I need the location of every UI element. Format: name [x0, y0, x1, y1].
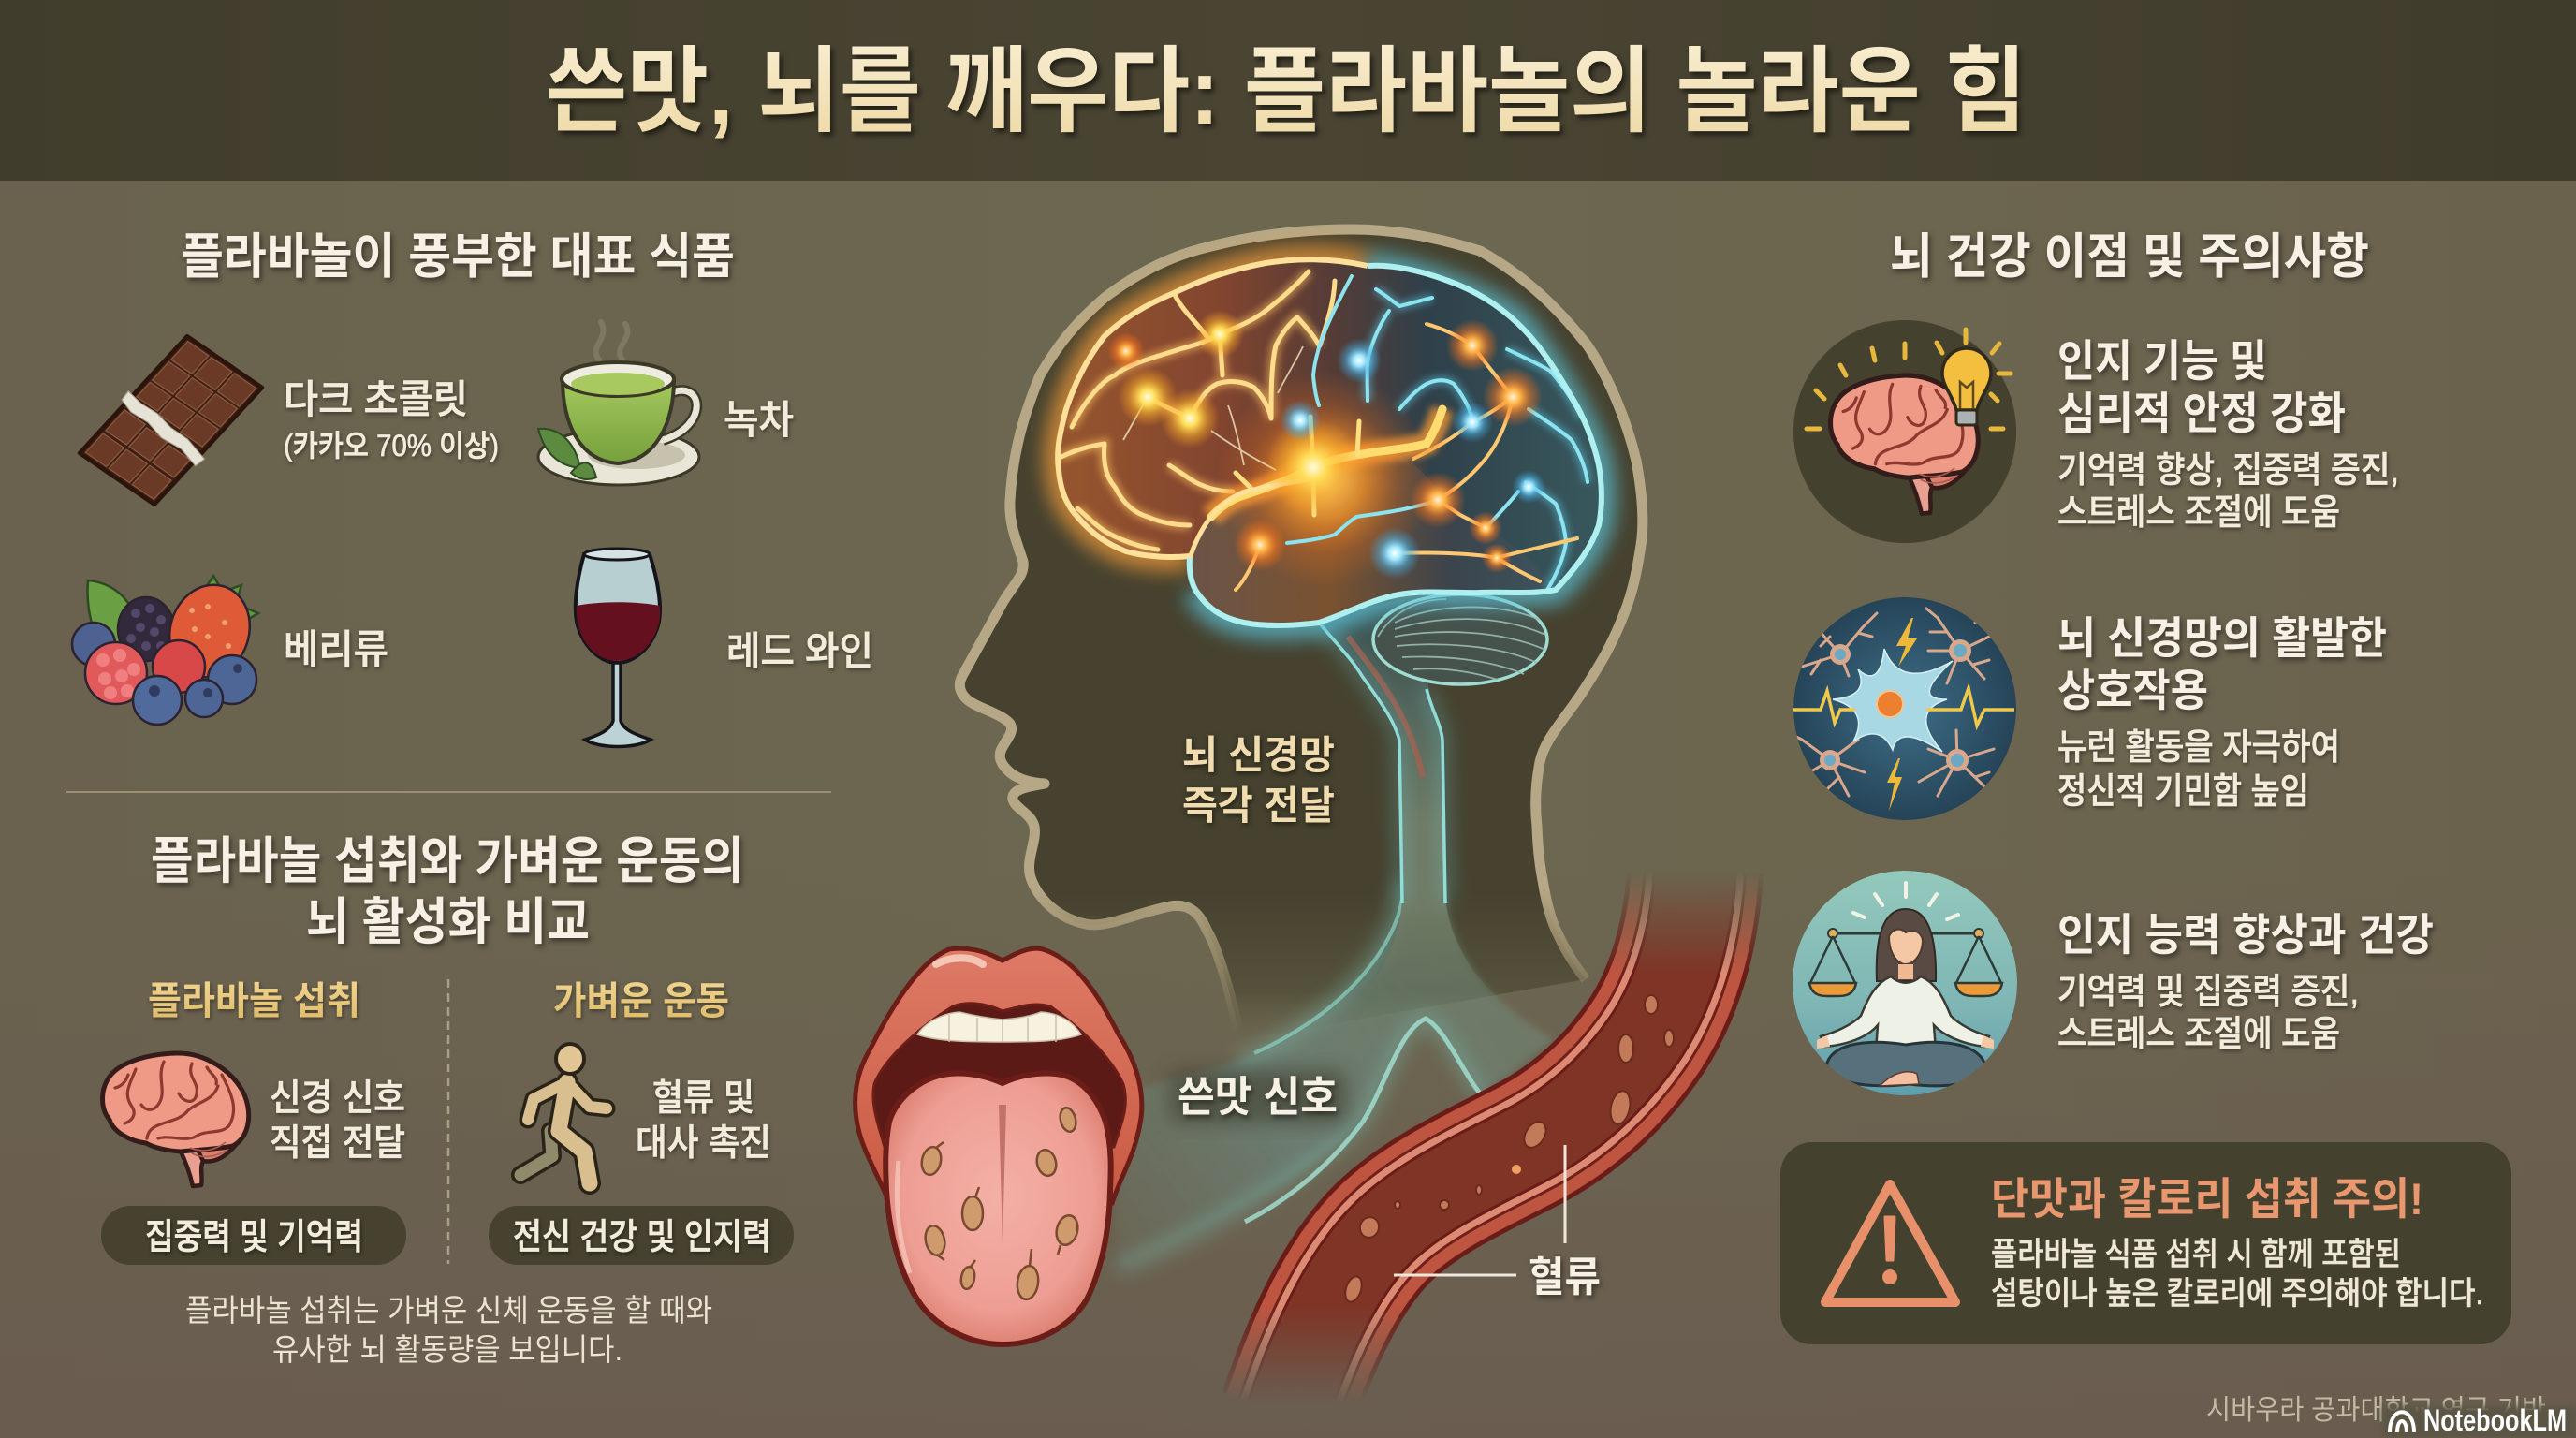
label: green tea: 녹차 — [724, 398, 794, 442]
heading: comparison: 뇌 활성화 비교 — [306, 894, 590, 950]
text: blood flow: 대사 촉진 — [636, 1123, 771, 1164]
text: cognitive function: 스트레스 조절에 도움 — [2057, 493, 2340, 533]
icon: brain with light bulb — [1793, 320, 2016, 543]
label: cacao note: (카카오 70% 이상) — [284, 429, 499, 462]
icon: meditating person with scales — [1793, 871, 2017, 1095]
text: neural signal: 신경 신호 — [270, 1078, 405, 1119]
text: neural interaction: 정신적 기민함 높임 — [2057, 772, 2309, 812]
text: neural signal — [270, 1078, 405, 1164]
text: warning body: 플라바놀 식품 섭취 시 함께 포함된 — [1991, 1237, 2401, 1272]
caption: 유사한 뇌 활동량을 보입니다. — [272, 1332, 622, 1367]
text: cognitive function — [2057, 336, 2399, 533]
heading: comparison — [151, 833, 744, 950]
label: berries: 베리류 — [284, 627, 388, 671]
illustration: head silhouette — [959, 229, 1643, 1040]
icon: walking person — [520, 1044, 607, 1183]
icon: red wine — [576, 549, 660, 747]
footer source: 시바우라 공과대학교 연구 기반 — [2206, 1395, 2546, 1426]
callout: blood flow: 혈류 — [1529, 1255, 1601, 1300]
icon: warning triangle — [1825, 1184, 1955, 1302]
text: neural interaction: 상호작용 — [2057, 666, 2208, 715]
text: cognitive ability: 스트레스 조절에 도움 — [2057, 1015, 2340, 1054]
sub-heading: light exercise: 가벼운 운동 — [553, 979, 729, 1022]
heading: warning: 단맛과 칼로리 섭취 주의! — [1991, 1174, 2423, 1224]
illustration: glowing brain — [1058, 259, 1602, 637]
pill: focus and memory — [101, 1206, 406, 1265]
text: neural interaction: 뇌 신경망의 활발한 — [2057, 613, 2387, 663]
icon: brain — [103, 1053, 249, 1186]
text: blood flow: 혈류 및 — [652, 1078, 754, 1119]
text: neural interaction: 뉴런 활동을 자극하여 — [2057, 728, 2340, 768]
text: warning body: 설탕이나 높은 칼로리에 주의해야 합니다. — [1991, 1276, 2483, 1312]
pill: whole-body health — [489, 1206, 794, 1265]
callout: sugar and calorie warning — [1780, 1142, 2511, 1344]
panel: brain benefits — [1793, 230, 2434, 1095]
title: 쓴맛, 뇌를 깨우다: 플라바놀의 놀라운 힘 — [546, 39, 2027, 144]
icon: dark chocolate — [75, 332, 267, 508]
watermark badge — [2382, 1403, 2576, 1438]
icon: green tea — [538, 322, 699, 485]
label: red wine: 레드 와인 — [726, 629, 873, 673]
icon: watermark arcs — [2390, 1412, 2414, 1432]
pill: whole-body health: 전신 건강 및 인지력 — [513, 1218, 771, 1257]
title banner — [0, 0, 2576, 181]
label: neural relay: 뇌 신경망 — [1182, 733, 1335, 777]
icon: berries — [72, 574, 261, 725]
heading: comparison: 플라바놀 섭취와 가벼운 운동의 — [151, 833, 744, 889]
pill: focus and memory: 집중력 및 기억력 — [145, 1218, 363, 1257]
text: cognitive ability: 기억력 및 집중력 증진, — [2057, 973, 2359, 1012]
label: bitter signal: 쓴맛 신호 — [1178, 1073, 1338, 1121]
text: cognitive function: 인지 기능 및 — [2057, 336, 2267, 386]
text: warning body — [1991, 1237, 2483, 1312]
label: neural relay: 즉각 전달 — [1182, 784, 1335, 828]
text: cognitive ability — [2057, 910, 2434, 1054]
label: neural relay — [1182, 733, 1335, 828]
icon: neurons — [1793, 597, 2016, 820]
text: cognitive function: 심리적 안정 강화 — [2057, 389, 2346, 438]
caption — [185, 1293, 712, 1367]
illustration: taste signal pathway — [1114, 880, 1554, 1268]
heading: foods: 플라바놀이 풍부한 대표 식품 — [181, 230, 735, 285]
illustration: brain stem and cerebellum — [1319, 594, 1547, 1025]
sub-heading: flavanol intake: 플라바놀 섭취 — [148, 979, 360, 1022]
text: cognitive ability: 인지 능력 향상과 건강 — [2057, 910, 2434, 960]
panel: flavanol rich foods — [72, 230, 873, 747]
caption: 플라바놀 섭취는 가벼운 신체 운동을 할 때와 — [185, 1293, 712, 1328]
label: dark chocolate: 다크 초콜릿 — [284, 377, 468, 421]
text: blood flow — [636, 1078, 771, 1164]
text: neural signal: 직접 전달 — [270, 1123, 405, 1164]
illustration: mouth and tongue — [856, 948, 1142, 1344]
text: cognitive function: 기억력 향상, 집중력 증진, — [2057, 451, 2399, 491]
callout: blood flow — [1394, 1145, 1601, 1300]
panel: activation comparison — [101, 833, 794, 1367]
illustration: blood vessel — [1287, 871, 1695, 1414]
heading: benefits: 뇌 건강 이점 및 주의사항 — [1890, 230, 2369, 285]
text: neural interaction — [2057, 613, 2387, 812]
